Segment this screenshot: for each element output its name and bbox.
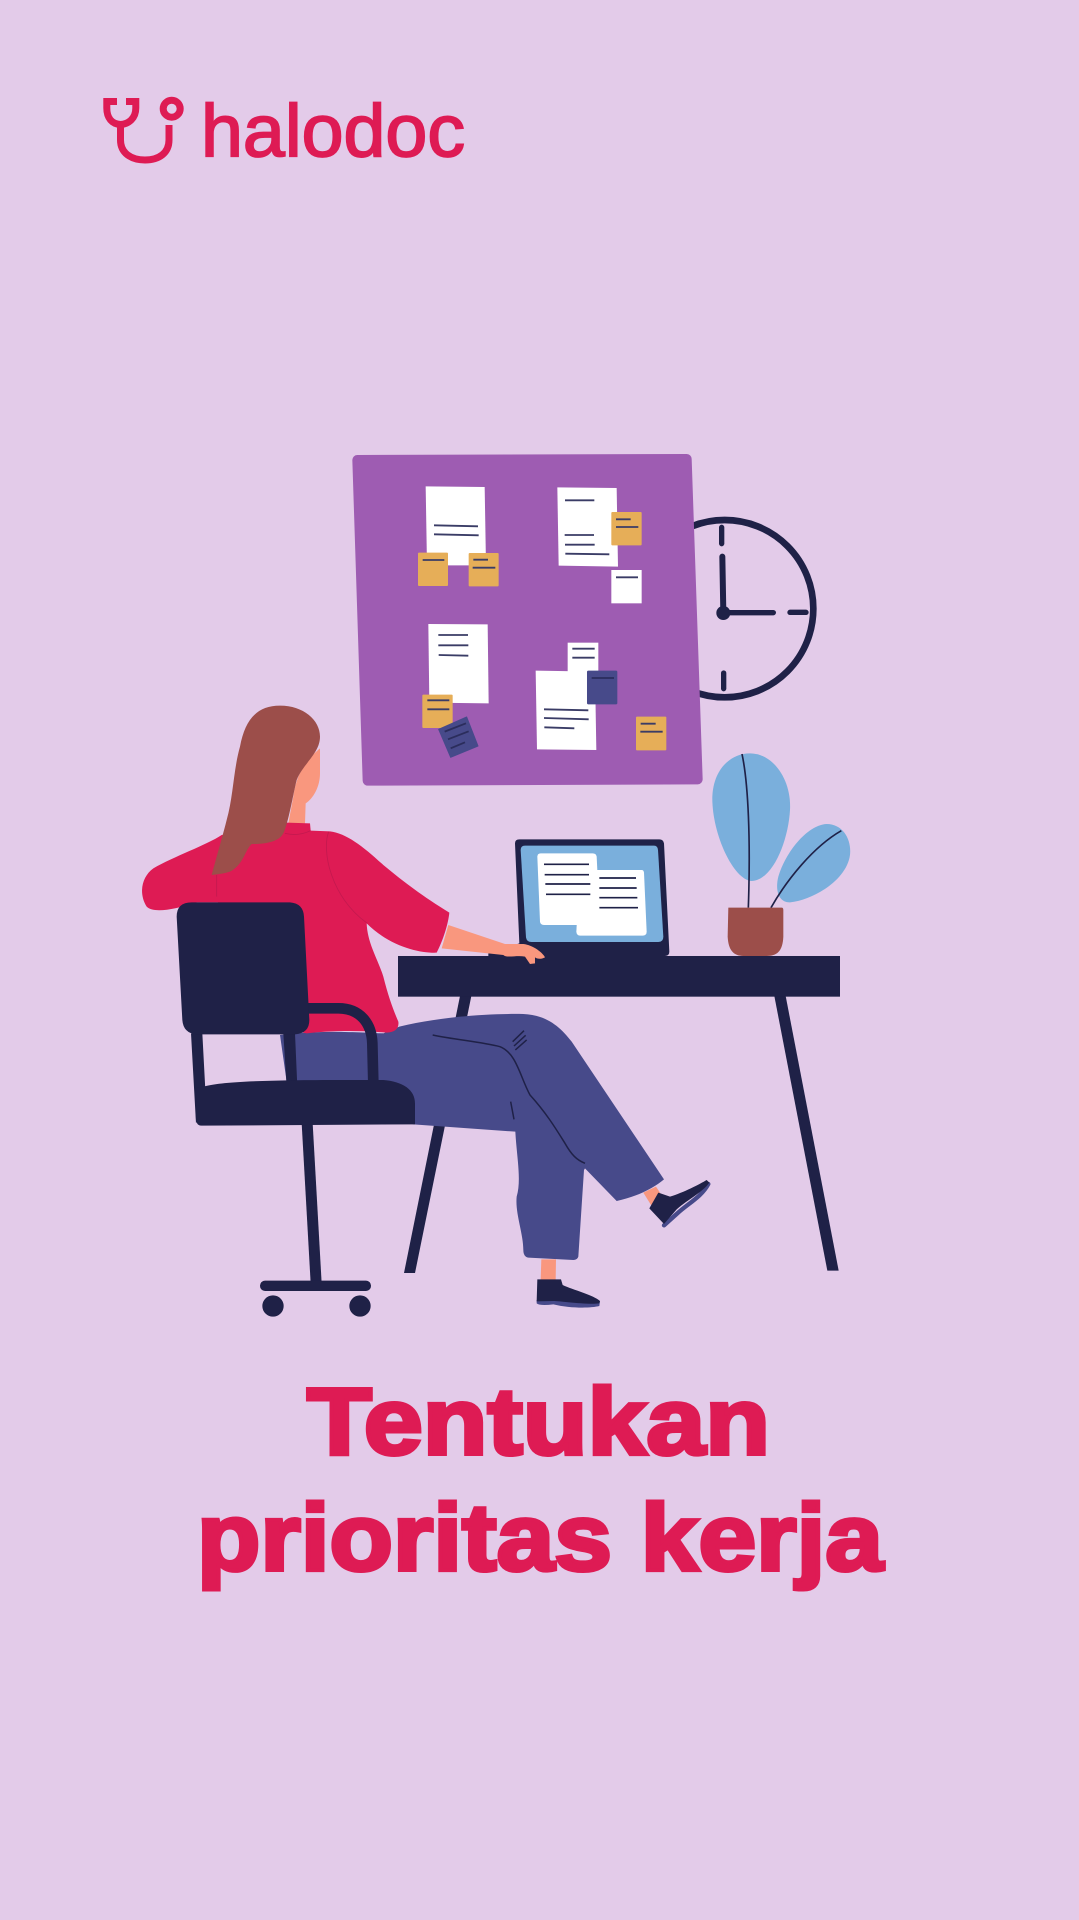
woman legs and shoes [280, 1014, 709, 1308]
icon: plant [712, 753, 850, 956]
chair supports [191, 1033, 297, 1123]
note group: bottom right [536, 643, 666, 750]
skin: face and neck [288, 748, 320, 823]
hair [212, 706, 320, 875]
trousers [280, 1014, 664, 1260]
ankles [541, 1187, 663, 1280]
note group: top left [418, 486, 499, 586]
logo wordmark: halodoc [201, 90, 465, 172]
title line 1: Tentukan [307, 1369, 770, 1475]
title [197, 1369, 884, 1591]
chair stem and wheels [260, 1123, 371, 1317]
trouser creases [433, 1031, 585, 1163]
chair seat [195, 1080, 415, 1126]
title line 2: prioritas kerja [197, 1485, 884, 1591]
arm and hand [442, 925, 545, 964]
shirt [142, 823, 449, 1033]
woman upper body [142, 706, 545, 1033]
illustration: clock and pin board [357, 459, 813, 781]
armrest [307, 1008, 373, 1083]
shoe: raised foot [649, 1180, 709, 1225]
shoe: floor foot [537, 1279, 600, 1308]
icon: wall clock [636, 520, 813, 697]
chair back [177, 902, 309, 1034]
icon: stethoscope [107, 100, 180, 160]
note group: top right [557, 487, 642, 603]
icon: laptop [488, 839, 669, 956]
illustration: woman and chair [142, 706, 709, 1317]
desk legs [404, 996, 839, 1273]
illustration: desk, laptop and plant [398, 753, 850, 1273]
note group: bottom left [422, 624, 489, 757]
logo: halodoc [107, 90, 465, 172]
shirt seams [217, 831, 367, 923]
office chair [177, 902, 415, 1317]
panel: purple board [357, 459, 698, 781]
desk top [398, 956, 840, 997]
